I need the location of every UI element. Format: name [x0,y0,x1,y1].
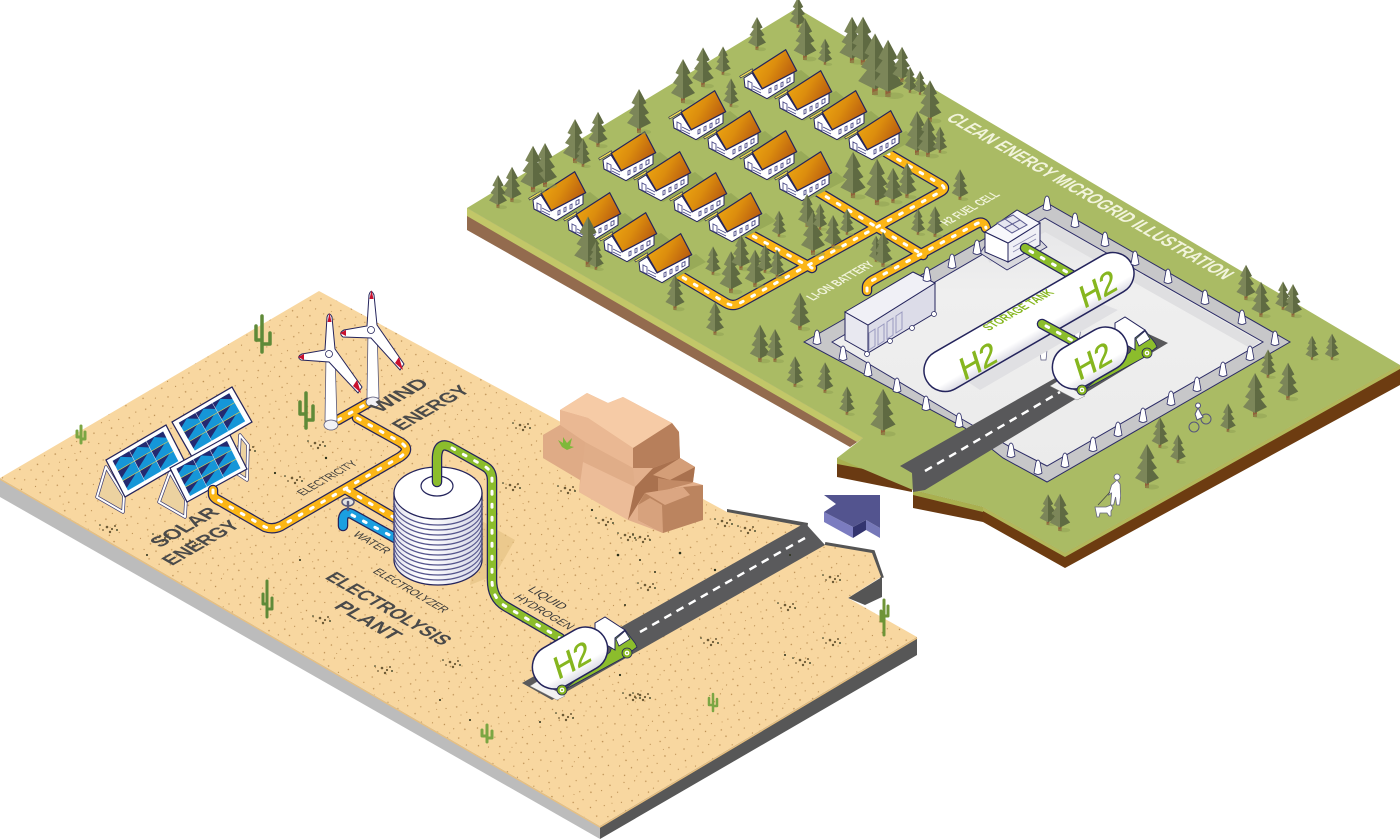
solar panel left [106,425,185,497]
solar panel front [170,435,247,502]
rock formation [543,393,703,533]
desert road [522,523,825,700]
microgrid road [900,330,1168,492]
solar panels [97,387,252,517]
label: solar energy: ENERGY [157,517,246,569]
solar panel back [172,387,252,457]
label: electrolyzer: ELECTROLYZER [369,566,453,615]
label: electrolysis plant: ELECTROLYSIS [320,569,456,649]
fence posts [813,196,1279,474]
truck H2 label: H2 [1071,335,1116,388]
truck H2 label: H2 [550,634,595,687]
microgrid hydrogen truck [1044,317,1157,400]
power line: electricity pipe [213,403,406,528]
power lines: village distribution [672,150,986,305]
label: liquid hydrogen: LIQUID [524,584,571,612]
storage tank [916,245,1142,399]
houses [529,50,916,284]
label: water: WATER [349,529,395,556]
label: wind energy: ENERGY [387,382,476,434]
wind turbines [298,290,404,430]
icon: person walking dog [1095,474,1121,517]
desert hydrogen truck [524,617,637,700]
electrolyzer tank [394,467,515,585]
turbine left [298,313,362,430]
panel frames [97,435,248,517]
hydrogen pipe [437,445,560,638]
label: storage tank: STORAGE TANK [979,287,1058,333]
icon: cacti [77,316,888,742]
desert speckle clusters [99,422,841,723]
water pipe and valve [342,498,395,538]
label: clean energy microgrid illustration: CLEAN ENERGY MICROGRID ILLUSTRATION [941,110,1239,283]
people at hydrogen transfer [1037,314,1081,360]
label: electricity: ELECTRICITY [293,458,361,498]
hydrogen pipe: storage to truck [1042,324,1075,342]
green microgrid platform [467,8,1400,568]
H2 mark left: H2 [956,335,1001,388]
icon: cyclist [1189,403,1211,432]
hydrogen pipe: fuel cell to storage [1025,248,1072,275]
arrow: blue isometric direction arrow [824,495,880,538]
label: wind energy: WIND [365,375,435,416]
turbine right [340,290,404,407]
trees [489,0,1339,532]
label: li-on battery: LI-ON BATTERY [803,259,878,303]
label: h2 fuel cell: H2 FUEL CELL [937,189,1003,228]
label: solar energy: SOLAR [145,504,225,551]
facility yard with fence [804,203,1290,482]
fuel cell unit [980,210,1047,270]
desert platform: electrolysis plant base [0,291,917,839]
label: electrolysis plant: PLANT [329,598,407,644]
H2 mark right: H2 [1076,263,1121,316]
battery container [845,272,936,356]
label: liquid hydrogen: HYDROGEN [510,592,578,632]
